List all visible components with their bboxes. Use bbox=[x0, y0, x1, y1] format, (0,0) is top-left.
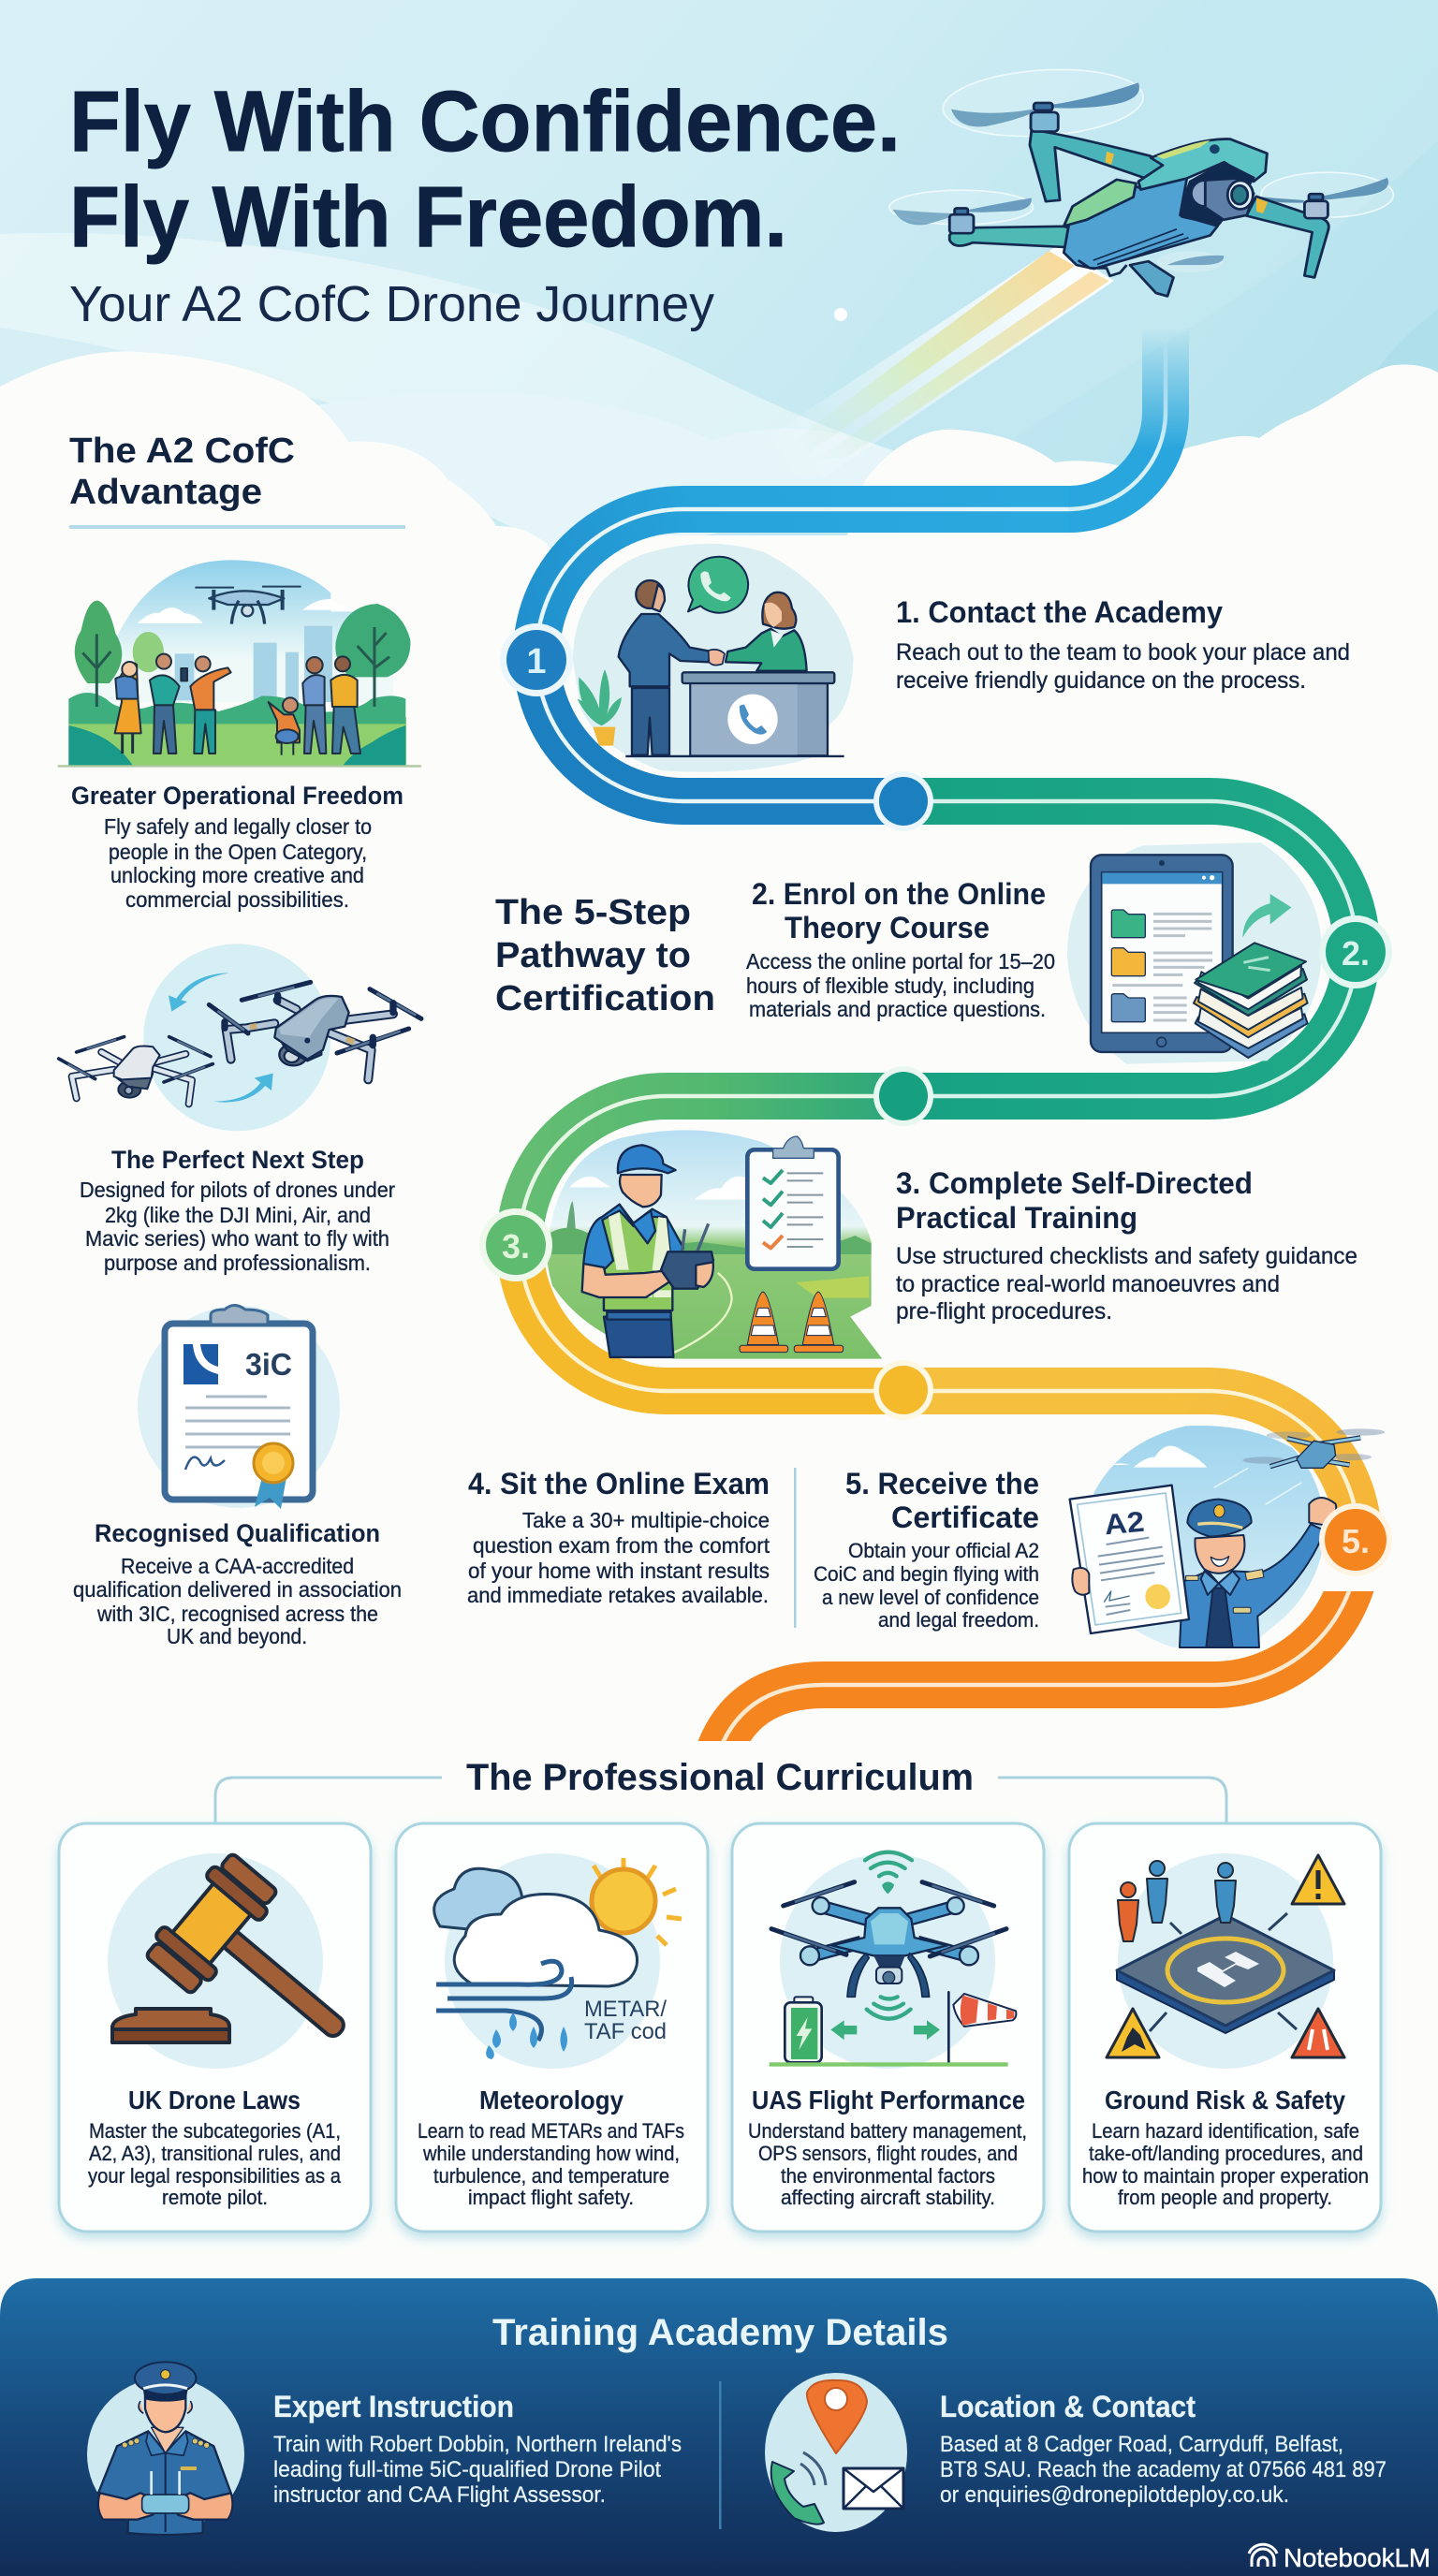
drone body bbox=[1064, 139, 1267, 269]
text: your legal responsibilities as a bbox=[88, 2164, 342, 2188]
small drone bbox=[195, 587, 301, 624]
segment: blue descent bbox=[1068, 323, 1166, 509]
text: recognised qualification: Recognised Qualification bbox=[95, 1519, 380, 1547]
text: greater operational freedom: commercial possibilities. bbox=[125, 887, 349, 912]
text: step 4 bbox=[467, 1467, 770, 1607]
text: step 2: hours of flexible study, incIuding bbox=[746, 973, 1034, 998]
body bbox=[831, 1908, 947, 1955]
icon: qualification clipboard bbox=[138, 1305, 340, 1509]
step node: 1: 1 bbox=[526, 642, 547, 681]
arms and motors bbox=[949, 103, 1328, 296]
text: step 1: receive friendly guidance on the process. bbox=[896, 667, 1306, 694]
text: step 5: Obtain your official A2 bbox=[848, 1539, 1039, 1562]
text: expert instruction: Train with Robert Dobbin, Northern Ireland's bbox=[273, 2432, 682, 2457]
step 2 illustration bbox=[1067, 842, 1322, 1064]
segment: green left loop bbox=[520, 1096, 903, 1243]
woman bbox=[726, 593, 807, 671]
text: greater operational freedom: Greater Operational Freedom bbox=[71, 782, 404, 810]
connector node: blue-teal bbox=[873, 771, 933, 831]
text: step 2: Theory Course bbox=[785, 911, 990, 944]
rotor discs bbox=[889, 64, 1393, 272]
step 5 illustration bbox=[1070, 1426, 1385, 1647]
text: expert instruction: leading full-time 5iC-qualified Drone Pilot bbox=[273, 2457, 661, 2482]
step 3 illustration bbox=[547, 1130, 882, 1359]
text: step 4: 4. Sit the Online Exam bbox=[468, 1467, 770, 1500]
text: the perfect next step: The Perfect Next Step bbox=[111, 1146, 364, 1174]
text: step 4: and immediate retakes available. bbox=[467, 1583, 769, 1607]
text: step 4: of your home with instant results bbox=[468, 1559, 770, 1583]
text: expert instruction bbox=[273, 2390, 682, 2508]
icon: park with drone bbox=[58, 560, 421, 768]
text: how to maintain proper experation bbox=[1082, 2164, 1369, 2188]
segment: blue upper loop bbox=[536, 509, 1068, 655]
step node: 2 bbox=[1319, 915, 1392, 988]
certificate: A2 bbox=[1103, 1506, 1146, 1541]
heading: Training Academy Details bbox=[492, 2312, 948, 2353]
text: step 2: Access the online portal for 15–20 bbox=[746, 949, 1055, 973]
heading: A2 CofC Advantage bbox=[69, 432, 405, 529]
text: impact flight safety. bbox=[468, 2186, 634, 2209]
text: expert instruction: instructor and CAA Flight Assessor. bbox=[273, 2482, 606, 2508]
heading: 5-step pathway: The 5-Step bbox=[495, 893, 691, 932]
text: location and contact: BT8 SAU. Reach the academy at 07566 481 897 bbox=[940, 2457, 1387, 2482]
heading: 5-step pathway: Pathway to bbox=[495, 936, 691, 975]
text: step 3 bbox=[896, 1166, 1357, 1325]
text: location and contact: or enquiries@dronepilotdeploy.co.uk. bbox=[940, 2482, 1289, 2508]
text: Ground Risk & Safety bbox=[1105, 2086, 1345, 2115]
text: the environmental factors bbox=[781, 2164, 995, 2188]
icon: location, phone, envelope bbox=[771, 2380, 903, 2525]
text: Learn to read METARs and TAFs bbox=[418, 2119, 684, 2143]
notebooklm badge: NotebookLM bbox=[1284, 2543, 1431, 2572]
drone light trail bbox=[721, 245, 1114, 477]
text: greater operational freedom bbox=[71, 782, 404, 912]
text: step 5: CoiC and begin flying with bbox=[814, 1562, 1039, 1586]
text bbox=[1082, 2086, 1369, 2209]
text: recognised qualification bbox=[73, 1519, 402, 1648]
plant bbox=[578, 669, 622, 746]
step node: 3 bbox=[479, 1208, 552, 1281]
segment: orange tail bbox=[698, 1591, 1374, 1741]
text bbox=[748, 2086, 1027, 2209]
text: step 3: Use structured checklists and safety guidance bbox=[896, 1243, 1357, 1269]
text: step 3: to practice real-world manoeuvres and bbox=[896, 1271, 1280, 1297]
icon: weather: TAF cod bbox=[584, 2019, 667, 2044]
text: take-oft/landing procedures, and bbox=[1089, 2142, 1363, 2165]
icon: qualification clipboard: 3iC bbox=[245, 1347, 292, 1382]
text: Learn hazard identification, safe bbox=[1092, 2119, 1359, 2143]
vents bbox=[1078, 229, 1189, 276]
text: greater operational freedom: people in the Open Category, bbox=[109, 840, 367, 864]
heading: 5-step pathway bbox=[495, 893, 715, 1018]
text: Meteorology bbox=[479, 2086, 624, 2115]
subtitle: Your A2 CofC Drone Journey bbox=[69, 276, 714, 332]
text: step 2 bbox=[746, 877, 1055, 1021]
small drone bbox=[1242, 1428, 1385, 1468]
books bbox=[1194, 943, 1308, 1058]
text: recognised qualification: UK and beyond. bbox=[167, 1624, 307, 1648]
step 1 illustration bbox=[573, 544, 854, 772]
text: step 4: question exam from the comfort bbox=[473, 1533, 770, 1558]
text: step 1: Reach out to the team to book your place and bbox=[896, 639, 1350, 666]
text: greater operational freedom: unlocking more creative and bbox=[110, 863, 364, 887]
propellers bbox=[771, 1882, 1006, 1956]
text: step 5: Certificate bbox=[891, 1500, 1039, 1534]
title line 2: Fly With Freedom. bbox=[69, 169, 787, 265]
title: Fly With Confidence. bbox=[69, 74, 901, 169]
icon: weather: METAR/ bbox=[584, 1997, 667, 2022]
text: turbulence, and temperature bbox=[433, 2164, 669, 2188]
icon: drone and sensors bbox=[770, 1852, 1016, 2067]
text: the perfect next step bbox=[80, 1146, 395, 1275]
text bbox=[418, 2086, 684, 2209]
title block bbox=[69, 74, 901, 332]
text: the perfect next step: Designed for pilots of drones under bbox=[80, 1178, 395, 1202]
text: step 1 bbox=[896, 595, 1350, 694]
text: the perfect next step: 2kg (like the DJI Mini, Air, and bbox=[105, 1203, 371, 1227]
text: step 1: 1. Contact the Academy bbox=[896, 595, 1223, 629]
heading: professional curriculum: The Professional Curriculum bbox=[466, 1757, 974, 1798]
text: step 3: Practical Training bbox=[896, 1201, 1137, 1235]
chat bubble bbox=[688, 557, 748, 613]
panel: UK Drone Laws bbox=[59, 1823, 384, 2232]
text: Master the subcategories (A1, bbox=[89, 2119, 341, 2143]
panel: Training Academy Details bbox=[0, 2278, 1438, 2576]
segment: teal right loop bbox=[903, 801, 1357, 1096]
windsock bbox=[948, 1992, 1016, 2062]
officer bbox=[1180, 1498, 1336, 1647]
text: step 5 bbox=[814, 1467, 1039, 1632]
panel: Meteorology bbox=[396, 1823, 708, 2232]
connector node: green-yellow bbox=[873, 1360, 933, 1420]
text: A2, A3), transitional rules, and bbox=[89, 2142, 341, 2165]
text: step 4: Take a 30+ multipie-choice bbox=[522, 1508, 770, 1532]
arms bbox=[810, 1907, 969, 1956]
text: step 3: 3. Complete Self-Directed bbox=[896, 1166, 1253, 1200]
small drone bbox=[59, 1037, 213, 1104]
signal arcs bbox=[865, 1852, 912, 2019]
heading: A2 CofC Advantage: The A2 CofC bbox=[69, 432, 295, 471]
heading: A2 CofC Advantage: Advantage bbox=[69, 473, 262, 512]
text: recognised qualification: with 3IC, recognised acress the bbox=[96, 1602, 378, 1626]
text: recognised qualification: qualification delivered in association bbox=[73, 1577, 402, 1602]
certificate bbox=[1070, 1486, 1189, 1633]
step node: 1 bbox=[500, 623, 573, 696]
text: OPS sensors, flight roudes, and bbox=[758, 2142, 1018, 2165]
hero drone bbox=[889, 64, 1393, 296]
tablet bbox=[1091, 855, 1233, 1052]
swap arrows bbox=[169, 973, 273, 1103]
text: location and contact bbox=[940, 2390, 1387, 2508]
text: greater operational freedom: Fly safely and legally closer to bbox=[104, 814, 372, 839]
people bbox=[115, 654, 360, 755]
icon: weather bbox=[434, 1858, 682, 2059]
text: step 2: materials and practice questions. bbox=[749, 997, 1046, 1021]
text: the perfect next step: Mavic series) who want to fly with bbox=[85, 1226, 389, 1251]
text: location and contact: Based at 8 Cadger Road, Carryduff, Belfast, bbox=[940, 2432, 1343, 2457]
heading: 5-step pathway: Certification bbox=[495, 979, 715, 1018]
step node: 2: 2. bbox=[1342, 934, 1370, 973]
text: from people and property. bbox=[1118, 2186, 1332, 2209]
text: UAS Flight Performance bbox=[752, 2086, 1025, 2115]
text: while understanding how wind, bbox=[422, 2142, 680, 2165]
connector node: teal-green bbox=[873, 1066, 933, 1126]
text: UK Drone Laws bbox=[128, 2086, 301, 2115]
text: step 5: 5. Receive the bbox=[845, 1467, 1039, 1500]
segment: blue lower loop bbox=[536, 655, 903, 801]
text: step 5: a new level of confidence bbox=[822, 1586, 1039, 1609]
step node: 5 bbox=[1319, 1503, 1392, 1576]
desk bbox=[625, 672, 844, 756]
icon: landing pad and hazards bbox=[1107, 1855, 1344, 2057]
controller bbox=[661, 1223, 713, 1289]
arrow bbox=[1242, 894, 1291, 938]
text: step 3: pre-flight procedures. bbox=[896, 1298, 1112, 1325]
text: location and contact: Location & Contact bbox=[940, 2390, 1196, 2423]
step node: 5: 5. bbox=[1342, 1522, 1370, 1560]
text: step 2: 2. Enrol on the Online bbox=[752, 877, 1046, 911]
journey path bbox=[520, 323, 1358, 1760]
battery bbox=[785, 1997, 822, 2062]
worker bbox=[582, 1145, 683, 1357]
text: the perfect next step: purpose and professionalism. bbox=[104, 1251, 371, 1275]
text bbox=[88, 2086, 342, 2209]
icon: two drones bbox=[59, 944, 421, 1131]
text: recognised qualification: Receive a CAA-accredited bbox=[121, 1554, 354, 1578]
panel: UAS Flight Performance bbox=[732, 1823, 1044, 2232]
icon: pilot bbox=[98, 2362, 233, 2535]
clouds bbox=[0, 351, 1438, 2284]
divider and avatars bbox=[87, 2373, 907, 2532]
icon: gavel bbox=[112, 1849, 384, 2084]
text: affecting aircraft stability. bbox=[781, 2186, 995, 2209]
segment: yellow right curve bbox=[903, 1391, 1358, 1540]
heading: professional curriculum bbox=[215, 1757, 1226, 1823]
text: remote pilot. bbox=[162, 2186, 268, 2209]
large drone bbox=[209, 982, 421, 1079]
checklist clipboard bbox=[747, 1136, 839, 1269]
text: step 5: and legal freedom. bbox=[878, 1608, 1039, 1632]
step node: 3: 3. bbox=[502, 1227, 530, 1266]
traffic cones bbox=[740, 1292, 844, 1353]
panel: Ground Risk & Safety bbox=[1069, 1823, 1381, 2232]
text: Understand battery management, bbox=[748, 2119, 1027, 2143]
text: expert instruction: Expert Instruction bbox=[273, 2390, 514, 2423]
man bbox=[619, 580, 712, 755]
segment: yellow left loop bbox=[520, 1243, 903, 1391]
